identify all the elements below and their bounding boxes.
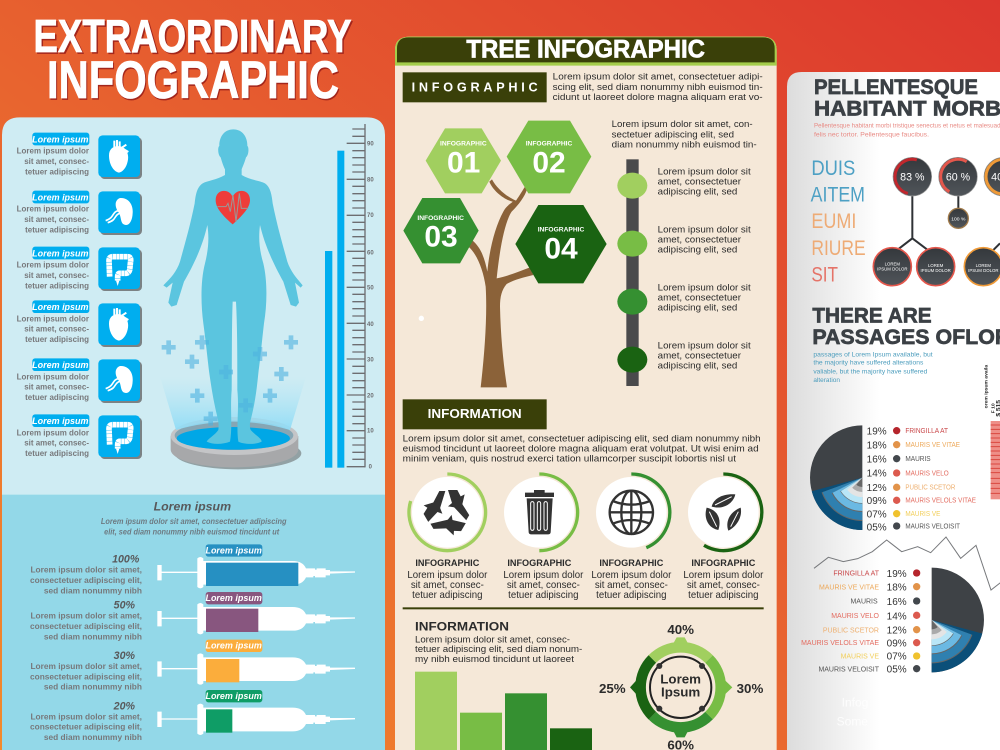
legend 2: MAURIS VELOLS VITAE	[801, 640, 879, 647]
legend 2: MAURIS VELO	[831, 613, 880, 620]
timeline item 2: adipiscing elit, sed	[658, 245, 737, 255]
list item: kidney 2: sit amet, consec-	[24, 383, 89, 392]
timeline item 1: Lorem ipsum dolor sit	[658, 166, 751, 176]
hexagon 01: 01	[447, 147, 480, 180]
node 1	[873, 248, 911, 286]
ruler scale: 50	[367, 286, 374, 292]
legend 2: MAURIS VE VITAE	[819, 584, 879, 591]
list item: heart 2: Lorem ipsum	[32, 302, 89, 312]
legend 2	[801, 569, 920, 676]
bar: 88	[337, 151, 344, 468]
list item: kidney 1	[17, 191, 142, 235]
icon: globe	[596, 474, 670, 548]
donut chart: 40%	[667, 622, 694, 637]
ruler scale: 80	[367, 178, 374, 184]
list item: heart 1	[17, 133, 142, 179]
human figure	[163, 129, 303, 444]
caption 2: tetuer adipiscing	[508, 590, 578, 601]
side text: diam nonummy nibh euismod tin-	[612, 139, 757, 149]
legend 1: 19%	[867, 426, 887, 437]
circle 83%	[891, 155, 932, 196]
legend 1: MAURIS	[905, 456, 931, 463]
syringe row 20%: consectetuer adipiscing elit,	[30, 722, 142, 732]
information text	[415, 634, 582, 664]
legend 2: MAURIS VELOISIT	[818, 666, 880, 673]
donut chart: 30%	[737, 681, 763, 696]
paragraph: Lorem ipsum dolor sit amet, consectetuer adipiscing elit, sed diam nonummy nibh	[403, 433, 761, 443]
list item: intestine 1: Lorem ipsum	[32, 248, 89, 258]
caption 3: sit amet, consec-	[595, 580, 668, 591]
pie chart 1	[810, 425, 862, 530]
circle 100%	[948, 208, 968, 228]
list item: kidney 2: tetuer adipiscing	[25, 393, 89, 402]
vertical label: orem Ipsum availa	[984, 365, 990, 408]
paragraph: alteration	[813, 377, 840, 384]
subtitle	[814, 122, 1000, 138]
syringe row 100%: sed diam nonummy nibh	[44, 585, 142, 595]
list item: intestine 2: sit amet, consec-	[24, 439, 89, 448]
list item: intestine 2: Lorem ipsum dolor	[17, 428, 89, 437]
connector lines	[895, 196, 1000, 252]
legend 2: 19%	[887, 569, 907, 580]
title: EXTRAORDINARY	[35, 12, 353, 64]
vertical label: F 10	[990, 403, 996, 413]
legend 1: MAURIS VE VITAE	[905, 442, 960, 449]
list item: kidney 2: Lorem ipsum	[32, 360, 89, 370]
donut chart: Ipsum	[661, 684, 700, 699]
list item: heart 1: tetuer adipiscing	[25, 167, 89, 176]
heading: Lorem ipsum	[154, 500, 231, 514]
syringe row 50%	[30, 592, 355, 641]
hexagon 03: 03	[424, 221, 458, 254]
list item: heart 2: Lorem ipsum dolor	[17, 314, 89, 323]
paragraph: passages of Lorem Ipsum available, but	[813, 351, 933, 358]
caption 2	[503, 558, 584, 601]
side text: sectetuer adipiscing elit, sed	[612, 129, 734, 139]
word list: AITEM	[811, 181, 865, 206]
timeline item 4	[617, 340, 751, 373]
list item: kidney 1: Lorem ipsum	[32, 192, 89, 202]
timeline item 3: adipiscing elit, sed	[658, 303, 737, 313]
ruler scale: 70	[367, 213, 374, 219]
syringe row 50%: 50%	[114, 600, 136, 612]
syringe row 30%: consectetuer adipiscing elit,	[30, 671, 142, 681]
hexagon 03	[403, 198, 479, 263]
word list	[811, 155, 866, 286]
list item: intestine 2: Lorem ipsum	[32, 416, 89, 426]
ruler scale	[347, 124, 374, 471]
circle 40%	[984, 157, 1000, 196]
list item: heart 2	[17, 300, 142, 347]
donut chart	[599, 622, 763, 750]
list item: intestine 1: tetuer adipiscing	[25, 281, 89, 290]
paragraph: euismod tincidunt ut laoreet dolore magna aliquam erat volutpat. Ut wisi enim ad	[403, 444, 759, 454]
small star	[419, 316, 424, 321]
panel: pie charts	[801, 421, 1000, 729]
title: INFOGRAPHIC	[47, 51, 339, 110]
information heading: INFORMATION	[415, 619, 509, 633]
ruler scale: 60	[367, 250, 374, 256]
list item: heart 1: Lorem ipsum	[32, 134, 89, 144]
node 2: IPSUM DOLOR	[921, 268, 951, 273]
faint footer text: Infog	[842, 696, 868, 710]
intro text: elit, sed diam nonummy nibh euismod tincidunt ut	[104, 526, 280, 536]
caption 4: tetuer adipiscing	[688, 590, 758, 601]
syringe row 50%: sed diam nonummy nibh	[44, 631, 142, 641]
syringe row 20%: sed diam nonummy nibh	[44, 732, 142, 742]
medical crosses	[162, 335, 298, 426]
legend 2: 16%	[887, 597, 907, 608]
striped bars	[991, 421, 1000, 499]
legend 2: MAURIS VE	[841, 654, 879, 661]
syringe row 50%: Lorem ipsum	[205, 593, 262, 603]
syringe row 30%: Lorem ipsum dolor sit amet,	[30, 661, 142, 671]
caption 1: sit amet, consec-	[411, 580, 484, 591]
subtitle: felis nec tortor. Pellentesque faucibus.	[814, 131, 929, 138]
word list: RIURE	[811, 235, 866, 260]
intro text: Lorem ipsum dolor sit amet, consectetuer adipi-	[553, 72, 763, 82]
header bar	[395, 37, 777, 66]
syringe row 20%	[30, 690, 355, 742]
hexagon 02: INFOGRAPHIC	[526, 141, 572, 148]
information label	[403, 399, 547, 429]
title	[34, 10, 353, 112]
paragraph	[403, 433, 761, 464]
icon: recycle	[409, 474, 486, 551]
legend 1: MAURIS VELOISIT	[905, 523, 961, 530]
syringe row 20%: Lorem ipsum dolor sit amet,	[30, 711, 142, 721]
panel: syringes	[2, 495, 385, 750]
timeline item 2	[617, 224, 751, 257]
intro text: scing elit, sed diam nonummy nibh euismod tin-	[553, 82, 763, 92]
hexagon 02	[507, 121, 591, 193]
syringe row 100%: consectetuer adipiscing elit,	[30, 575, 142, 585]
node 2: LOREM	[928, 263, 944, 268]
legend 1	[867, 426, 976, 533]
caption 1: tetuer adipiscing	[412, 590, 482, 601]
information label: INFORMATION	[428, 407, 522, 421]
timeline item 4: adipiscing elit, sed	[658, 361, 737, 371]
caption 3: tetuer adipiscing	[596, 590, 666, 601]
list item: heart 2: sit amet, consec-	[24, 325, 89, 334]
paragraph	[813, 351, 933, 384]
list item: heart 1: sit amet, consec-	[24, 157, 89, 166]
icon: leaves	[688, 474, 762, 551]
caption 3	[591, 558, 672, 601]
circle 83%: 83 %	[900, 172, 925, 184]
hexagon 04: INFOGRAPHIC	[538, 227, 584, 234]
ruler scale: 40	[367, 322, 374, 328]
hexagon 01	[426, 128, 501, 193]
syringe row 30%	[30, 640, 355, 692]
syringe row 20%: 20%	[113, 700, 136, 712]
platform	[171, 417, 301, 469]
intro text: Lorem ipsum dolor sit amet, consectetuer adipiscing	[101, 516, 286, 526]
intro text	[553, 72, 763, 102]
legend 1: MAURIS VELO	[905, 470, 949, 477]
ruler scale: 0	[369, 465, 373, 471]
heart with pulse	[216, 191, 250, 224]
tree trunk	[468, 179, 533, 387]
node 3	[964, 248, 1000, 286]
circle 100%: 100 %	[951, 216, 966, 222]
information text: tetuer adipiscing elit, sed diam nonum-	[415, 644, 582, 654]
caption 2: INFOGRAPHIC	[507, 558, 572, 568]
bar chart	[415, 672, 592, 750]
line chart	[814, 537, 1000, 590]
legend 1: 07%	[867, 509, 887, 520]
ruler scale: 20	[367, 393, 374, 399]
information text: Lorem ipsum dolor sit amet, consec-	[415, 634, 570, 644]
hexagon 02: 02	[532, 147, 566, 180]
node 1: IPSUM DOLOR	[877, 266, 907, 271]
word list: SIT	[811, 261, 838, 286]
paragraph: the majority have suffered alterations	[813, 360, 923, 367]
legend 1: 12%	[867, 483, 887, 494]
syringe row 30%: Lorem ipsum	[205, 641, 262, 651]
icon: trash can	[504, 474, 578, 551]
legend 1: FRINGILLA AT	[905, 428, 949, 435]
syringe row 100%: 100%	[112, 554, 140, 566]
list item: kidney 2	[17, 358, 142, 403]
heading: pellentesque: PELLENTESQUE	[814, 76, 978, 99]
legend 2: 14%	[887, 612, 907, 623]
paragraph: valiable, but the majority have suffered	[813, 368, 928, 375]
intro text	[101, 516, 286, 536]
title: TREE INFOGRAPHIC	[466, 36, 705, 63]
list item: intestine 1	[17, 247, 142, 291]
faint footer text: Some	[837, 715, 868, 729]
vertical label	[984, 365, 1000, 417]
legend 2: MAURIS	[850, 599, 878, 606]
list item: kidney 2: Lorem ipsum dolor	[17, 372, 89, 381]
caption 3: Lorem ipsum dolor	[591, 570, 672, 581]
legend 2: 12%	[887, 625, 907, 636]
syringe row 100%: Lorem ipsum dolor sit amet,	[30, 565, 142, 575]
node 3: IPSUM DOLOR	[968, 268, 998, 273]
circle 60%	[934, 153, 977, 196]
timeline rail	[626, 159, 639, 386]
timeline item 4: Lorem ipsum dolor sit	[658, 340, 751, 350]
syringe row 20%: Lorem ipsum	[205, 691, 262, 701]
information text: my nibh euismod tincidunt ut laoreet	[415, 654, 574, 664]
faint footer text	[837, 696, 868, 729]
legend 2: FRINGILLA AT	[833, 571, 880, 578]
syringe row 50%: consectetuer adipiscing elit,	[30, 621, 142, 631]
donut chart: Lorem	[660, 672, 701, 687]
legend 1: 16%	[867, 454, 887, 465]
legend 1: 18%	[867, 440, 887, 451]
legend 1: PUBLIC SCETOR	[905, 485, 955, 492]
caption 2: Lorem ipsum dolor	[503, 570, 584, 581]
legend 2: PUBLIC SCETOR	[823, 627, 879, 634]
list item: kidney 1: Lorem ipsum dolor	[17, 205, 89, 214]
pie chart 2	[932, 568, 984, 672]
title: EXTRAORDINARY	[34, 10, 352, 62]
donut chart: 25%	[599, 681, 626, 696]
timeline item 2: Lorem ipsum dolor sit	[658, 224, 751, 234]
caption 1: Lorem ipsum dolor	[407, 570, 488, 581]
caption 3: INFOGRAPHIC	[599, 558, 664, 568]
syringe row 100%	[30, 544, 355, 595]
caption 4: Lorem ipsum dolor	[683, 570, 764, 581]
hexagon 04	[515, 205, 607, 283]
hexagon 04: 04	[544, 233, 578, 266]
list item: heart 1: Lorem ipsum dolor	[17, 147, 89, 156]
caption 4	[683, 558, 764, 601]
word list: EUMI	[811, 208, 856, 233]
list item: kidney 1: sit amet, consec-	[24, 215, 89, 224]
node 1: LOREM	[885, 261, 900, 266]
legend 1: 14%	[867, 469, 887, 480]
legend 1: 09%	[867, 496, 887, 507]
list item: heart 2: tetuer adipiscing	[25, 335, 89, 344]
legend 2: 18%	[887, 583, 907, 594]
legend 2: 07%	[887, 652, 907, 663]
panel: tree infographic	[395, 36, 777, 750]
timeline item 1: adipiscing elit, sed	[658, 187, 737, 197]
label box	[403, 72, 547, 102]
ruler scale: 30	[367, 357, 374, 363]
legend 2: 09%	[887, 638, 907, 649]
legend 2: 05%	[887, 665, 907, 676]
legend 1: MAURIS VELOLS VITAE	[905, 498, 976, 505]
list item: intestine 1: Lorem ipsum dolor	[17, 261, 89, 270]
label box: INFOGRAPHIC	[412, 80, 538, 94]
caption 4: sit amet, consec-	[687, 580, 760, 591]
paragraph: minim veniam, quis nostrud exerci tation ullamcorper suscipit lobortis nisl ut	[403, 454, 736, 464]
caption 1: INFOGRAPHIC	[415, 558, 480, 568]
list item: kidney 1: tetuer adipiscing	[25, 225, 89, 234]
caption 1	[407, 558, 488, 601]
ruler scale: 10	[367, 429, 374, 435]
syringe row 100%: Lorem ipsum	[205, 545, 262, 555]
node 2	[917, 248, 955, 286]
side text: Lorem ipsum dolor sit amet, con-	[612, 119, 753, 129]
hexagon 01: INFOGRAPHIC	[440, 141, 487, 148]
intro text: cidunt ut laoreet dolore magna aliquam erat vo-	[553, 92, 763, 102]
bar: 60	[325, 251, 332, 468]
panel: body health	[2, 117, 385, 495]
syringe row 50%: Lorem ipsum dolor sit amet,	[30, 611, 142, 621]
circle 60%: 60 %	[946, 172, 971, 184]
heading: passages: THERE ARE	[812, 304, 932, 327]
list item: intestine 1: sit amet, consec-	[24, 271, 89, 280]
list item: intestine 2: tetuer adipiscing	[25, 449, 89, 458]
timeline item 2: amet, consectetuer	[658, 235, 741, 245]
syringe row 30%: sed diam nonummy nibh	[44, 682, 142, 692]
heading: pellentesque: HABITANT MORBI	[814, 98, 1000, 121]
side text	[612, 119, 757, 149]
caption 4: INFOGRAPHIC	[691, 558, 756, 568]
title: INFOGRAPHIC	[48, 52, 340, 112]
legend 1: 05%	[867, 522, 887, 533]
heading: passages	[812, 304, 1000, 349]
timeline item 3: Lorem ipsum dolor sit	[658, 282, 751, 292]
light beam	[160, 377, 306, 430]
list item: intestine 2	[17, 414, 142, 459]
timeline item 3: amet, consectetuer	[658, 293, 741, 303]
ruler scale: 90	[367, 142, 374, 148]
word list: DUIS	[811, 155, 855, 180]
timeline item 1: amet, consectetuer	[658, 177, 741, 187]
caption 2: sit amet, consec-	[507, 580, 580, 591]
panel: information	[403, 399, 764, 750]
panel: right report	[787, 72, 1000, 750]
timeline item 4: amet, consectetuer	[658, 351, 741, 361]
legend 1: MAURIS VE	[905, 511, 941, 518]
heading: pellentesque	[814, 76, 1000, 121]
timeline item 3	[617, 282, 751, 315]
timeline item 1	[617, 166, 751, 199]
node 3: LOREM	[976, 263, 991, 268]
hexagon 03: INFOGRAPHIC	[417, 215, 464, 222]
syringe row 30%: 30%	[114, 650, 136, 662]
